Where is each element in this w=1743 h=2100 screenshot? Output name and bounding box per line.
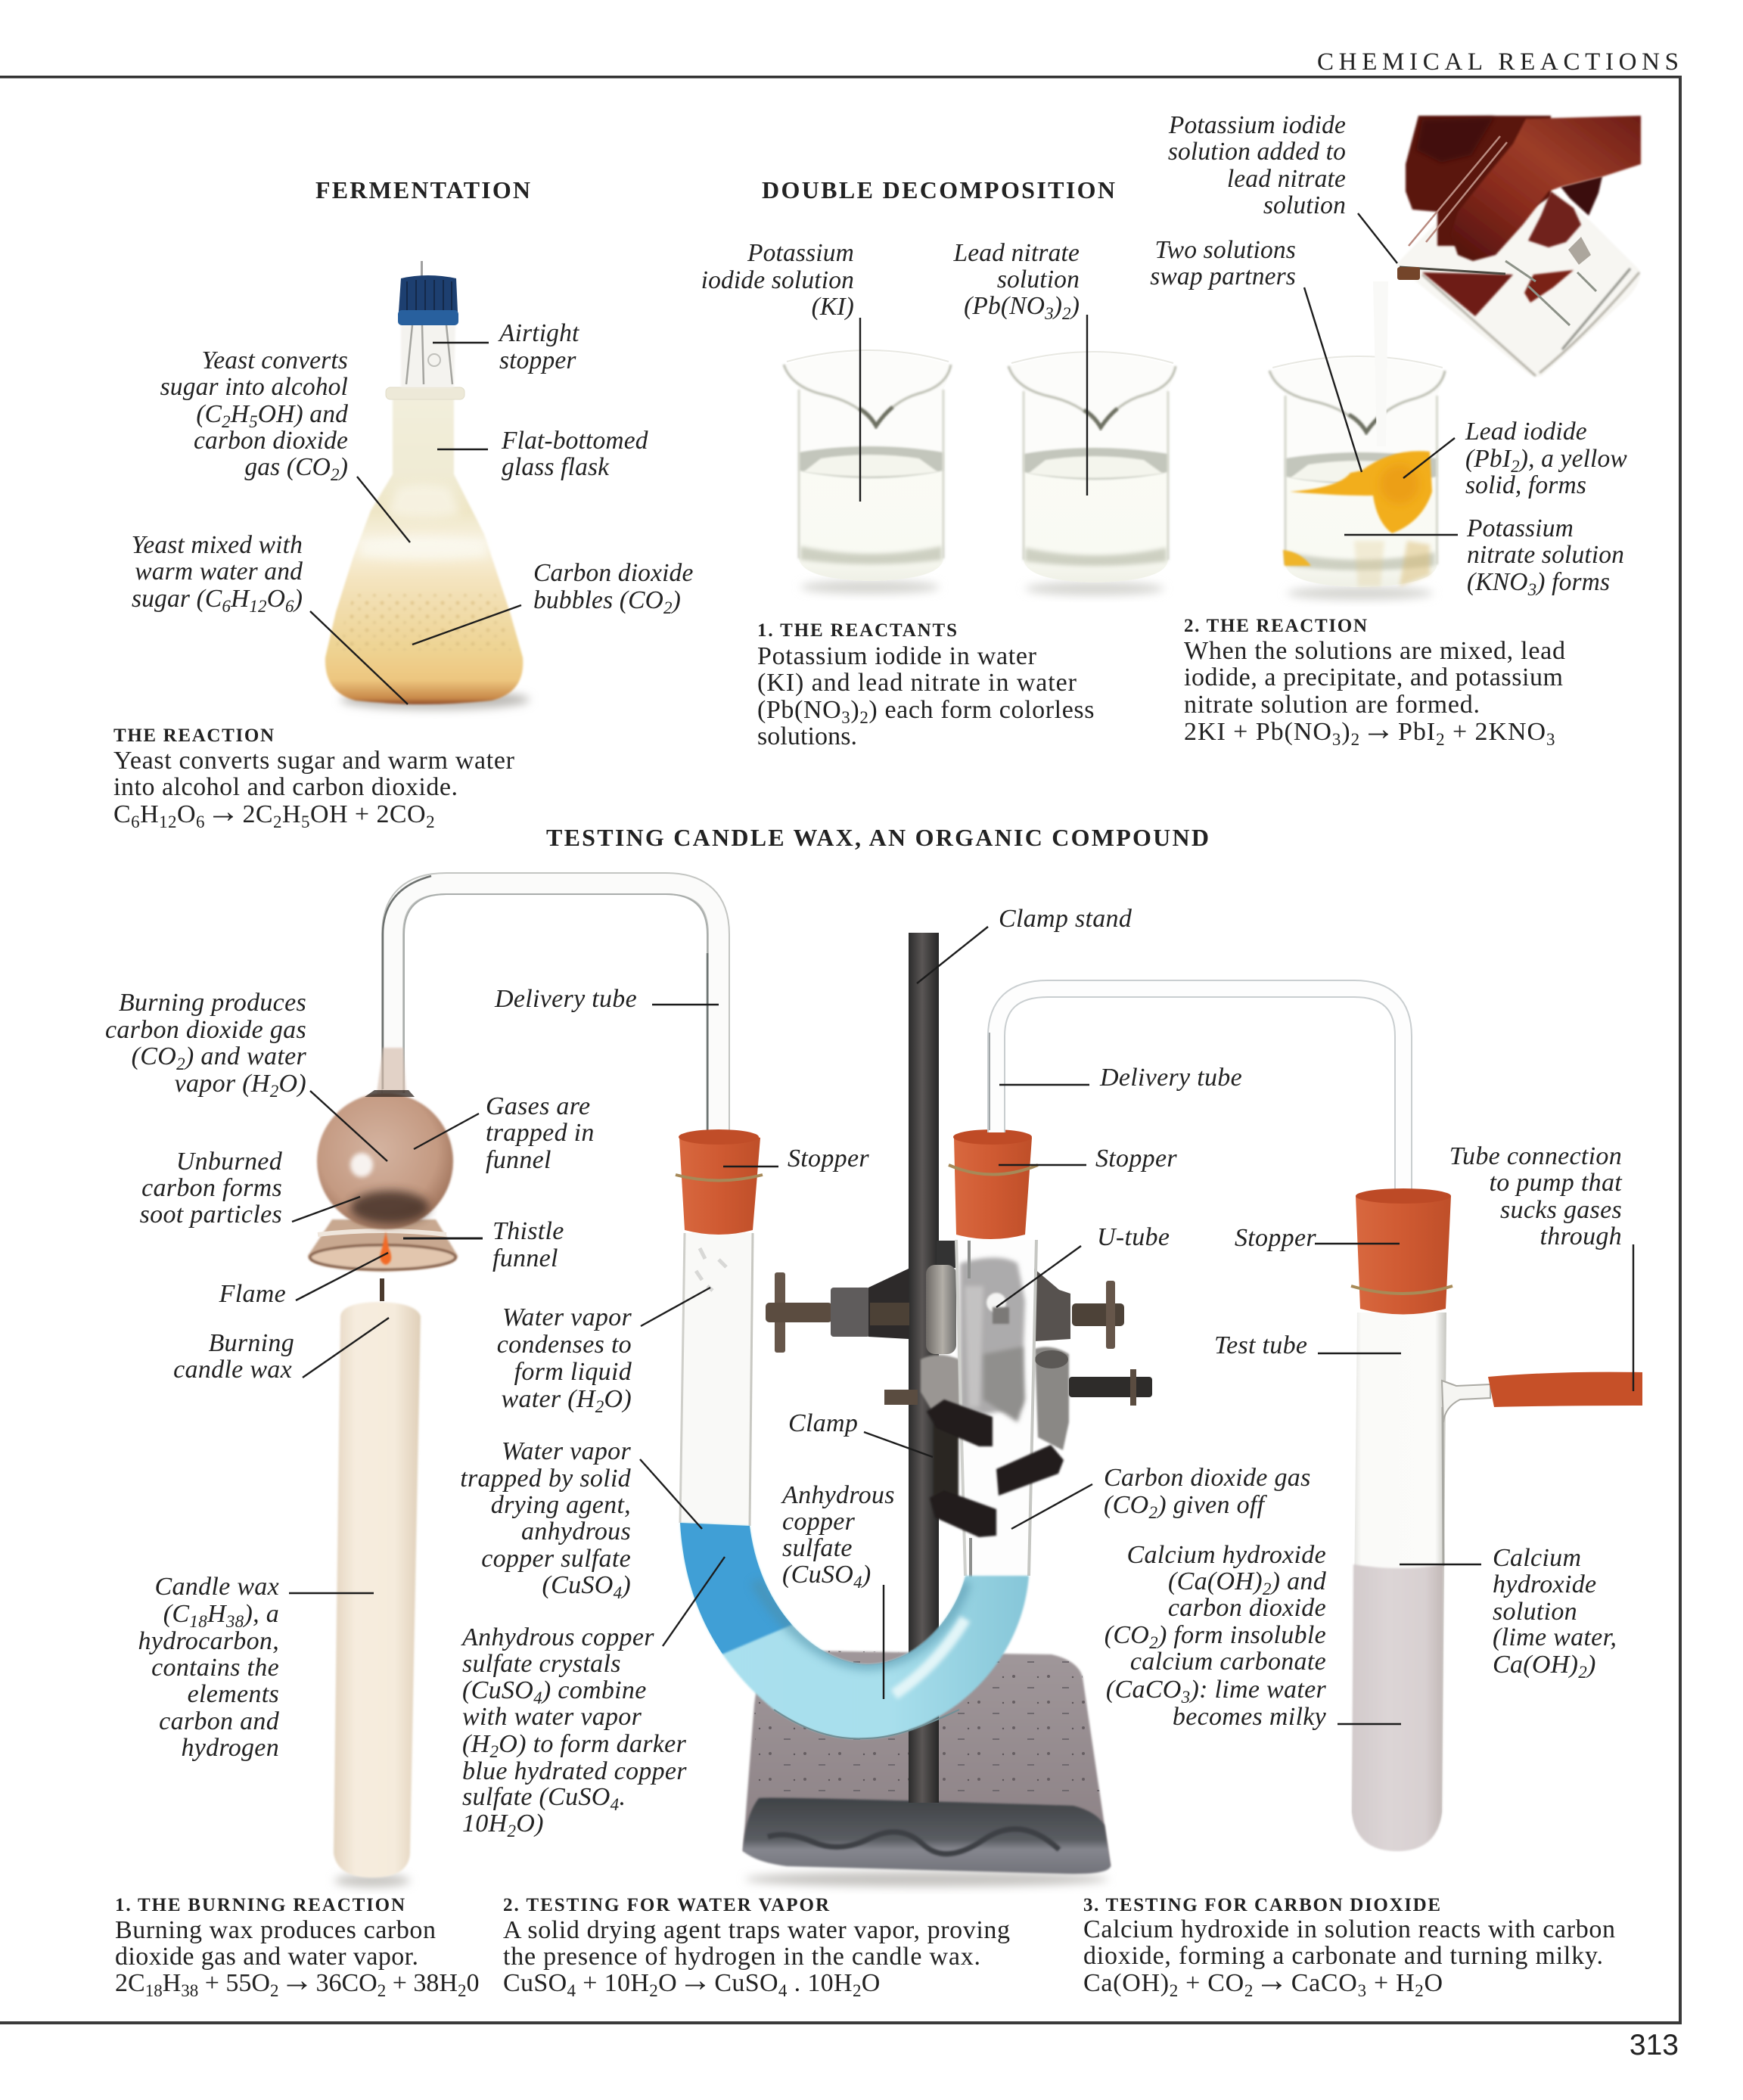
photo: candle [334,1278,421,1887]
label: calcium hydroxide solution: Ca(OH) [1493,1651,1578,1679]
label: water vapor condenses: form liquid [514,1358,632,1386]
label: yeast converts sugar: (C [196,400,222,428]
caption: the burning reaction: 2 [377,1981,386,2000]
label: water vapor trapped: trapped by solid [460,1465,632,1493]
heading: fermentation: FERMENTATION [315,176,530,203]
caption: testing for carbon dioxide: O [1424,1969,1443,1997]
label: lime water becomes milky: ) and [1270,1567,1327,1595]
label: delivery tube, left: Delivery tube [494,985,637,1013]
label: water vapor condenses: condenses to [497,1331,632,1359]
page number: 313 [1630,2029,1679,2061]
caption: the reaction, step two: 2KI + Pb(NO [1184,718,1332,746]
label: airtight stopper [433,319,579,374]
caption: the reactants [757,620,1095,750]
label: candle wax hydrocarbon: Candle wax [155,1573,279,1601]
caption: the reaction, step two: + 2KNO [1446,718,1546,746]
label: yeast mixed with water: 6 [222,597,231,616]
label: calcium hydroxide solution: solution [1493,1598,1577,1626]
label: candle wax hydrocarbon: 38 [225,1612,244,1631]
label: lime water becomes milky: ) form insoluble [1157,1621,1326,1649]
label: stopper, right arm: Stopper [1095,1145,1177,1173]
label: lime water becomes milky: (CaCO [1106,1676,1182,1704]
caption: the reactants: 2 [859,708,868,727]
label: candle wax hydrocarbon: hydrogen [181,1734,279,1762]
caption: the burning reaction: 18 [145,1981,163,2000]
page header: chemical reactions: CHEMICAL REACTIONS [1317,48,1679,76]
label: potassium nitrate: ) forms [1535,568,1610,596]
label: potassium iodide added: solution [1263,191,1346,219]
label: lead iodide: ), a yellow [1518,445,1627,473]
caption: the reaction, step two: 3 [1546,730,1555,749]
label: water vapor condenses: Water vapor [502,1303,632,1331]
label: burning produces gases: (CO [132,1042,176,1070]
label: anhydrous copper sulfate crystals: . [619,1783,626,1811]
caption: testing for water vapor: 4 [778,1981,788,2000]
label: anhydrous copper sulfate crystals: sulfate (CuSO [462,1783,611,1811]
label: yeast converts sugar: ) [338,453,348,481]
caption: the reaction: 2 [426,812,435,831]
caption: the reaction: 6 [131,812,140,831]
label: burning candle wax: Burning [208,1329,294,1357]
label: potassium nitrate [1344,514,1624,599]
label: anhydrous copper sulfate crystals: 2 [489,1742,499,1761]
label: lime water becomes milky: carbon dioxide [1168,1594,1326,1622]
caption: testing for carbon dioxide: 2 [1244,1981,1254,2000]
caption: the reaction: 5 [301,812,310,831]
caption: the reaction: into alcohol and carbon dioxide. [113,773,458,801]
label: lead nitrate solution: ) [1052,292,1062,320]
label: thistle funnel [403,1217,564,1272]
photo: U-tube with copper sulfate [666,1233,1036,1738]
label: tube connection to pump [1449,1142,1633,1391]
label: water vapor trapped: anhydrous [521,1518,631,1545]
page header: chemical reactions [0,48,1681,79]
label: lime water becomes milky: becomes milky [1173,1703,1327,1731]
label: lead nitrate solution: Lead nitrate [952,239,1080,267]
label: lead nitrate solution [952,239,1087,495]
label: burning produces gases: Burning produces [119,989,306,1017]
photo: thistle funnel with flame [308,1090,458,1272]
caption: testing for carbon dioxide: + CO [1179,1969,1244,1997]
label: lead iodide [1403,418,1627,499]
label: carbon dioxide bubbles [412,559,693,645]
label: water vapor trapped [460,1437,702,1602]
caption: the reactants: Potassium iodide in water [757,642,1037,670]
caption: the reactants: solutions. [757,722,857,750]
caption: testing for water vapor: 2 [649,1981,658,2000]
photo: fermentation flask [325,261,530,710]
label: two solutions swap partners: swap partners [1150,262,1296,290]
label: anhydrous copper sulfate crystals: ) combine [541,1676,647,1704]
label: water vapor trapped: 4 [614,1583,622,1602]
label: anhydrous copper sulfate: ) [861,1561,872,1589]
caption: the burning reaction: 2 [458,1981,466,2000]
label: lime water becomes milky: ): lime water [1188,1676,1326,1704]
label: anhydrous copper sulfate crystals: 4 [533,1688,542,1707]
caption: testing for water vapor: O [862,1969,881,1997]
label: test tube: Test tube [1214,1331,1307,1359]
label: burning produces gases: 2 [176,1055,185,1073]
caption: the reaction: THE REACTION [113,725,274,746]
caption: testing for water vapor: A solid drying agent traps water vapor, proving [503,1916,1010,1944]
label: clamp stand [917,905,1132,983]
label: stopper, test tube: Stopper [1235,1224,1316,1252]
label: gases trapped in funnel: funnel [486,1146,551,1174]
label: anhydrous copper sulfate crystals: O) [516,1810,544,1837]
label: U-tube: U-tube [1097,1223,1170,1251]
label: anhydrous copper sulfate crystals: O) to form darker [499,1730,687,1758]
caption: the reactants: (KI) and lead nitrate in water [757,669,1077,697]
caption: the reaction, step two: 2 [1351,730,1360,749]
label: potassium iodide added: solution added to [1168,138,1346,166]
label: potassium iodide solution: iodide solution [701,266,854,294]
label: anhydrous copper sulfate: 4 [853,1573,862,1592]
caption: the reaction, step two: iodide, a precipitate, and potassium [1184,663,1563,691]
label: yeast converts sugar: H [230,400,250,428]
label: calcium hydroxide solution: (lime water, [1493,1623,1617,1651]
label: thistle funnel: funnel [492,1244,558,1272]
label: lime water becomes milky [1105,1541,1401,1731]
label: potassium iodide added: lead nitrate [1227,165,1346,193]
label: anhydrous copper sulfate crystals: 2 [507,1822,516,1841]
label: carbon dioxide gas given off [1011,1464,1311,1529]
label: anhydrous copper sulfate: sulfate [782,1534,853,1562]
caption: the burning reaction: 36CO [315,1969,377,1997]
label: candle wax hydrocarbon: hydrocarbon, [138,1627,279,1655]
label: yeast mixed with water [132,531,408,704]
photo: beaker with yellow precipitate [1269,356,1445,600]
caption: the reaction, step two: 3 [1332,730,1341,749]
label: calcium hydroxide solution: Calcium [1493,1544,1581,1572]
label: lime water becomes milky: 2 [1263,1580,1272,1598]
label: lead nitrate solution: (Pb(NO [964,292,1045,320]
label: burning produces gases: ) and water [184,1042,306,1070]
label: lead nitrate solution: ) [1070,292,1080,320]
photo: stopper on left arm [676,1129,763,1235]
label: yeast converts sugar: carbon dioxide [194,427,348,455]
label: flame [219,1253,388,1308]
label: anhydrous copper sulfate: copper [782,1508,856,1536]
label: anhydrous copper sulfate crystals: 4 [611,1795,619,1814]
label: potassium nitrate: 3 [1527,580,1536,599]
label: candle wax hydrocarbon: contains the [151,1654,279,1682]
caption: the reaction, step two: ) [1341,718,1351,746]
label: carbon dioxide bubbles: bubbles (CO [533,586,663,614]
label: gases trapped in funnel [414,1092,595,1174]
label: anhydrous copper sulfate crystals: 10H [462,1810,507,1837]
label: carbon dioxide gas given off: 2 [1148,1503,1157,1522]
label: lead iodide: Lead iodide [1465,418,1587,446]
caption: the reaction: H [282,800,301,828]
label: two solutions swap partners [1150,236,1362,472]
label: unburned carbon soot: carbon forms [141,1174,282,1202]
label: water vapor condenses: 2 [595,1397,604,1416]
label: candle wax hydrocarbon [138,1573,374,1762]
caption: testing for water vapor: 2 [853,1981,862,2000]
label: yeast converts sugar: 2 [331,465,340,484]
caption: the burning reaction [115,1895,479,2000]
label: U-tube [996,1223,1170,1307]
label: yeast mixed with water: ) [293,585,303,613]
label: burning produces gases [105,989,387,1161]
caption: the reactants: (Pb(NO [757,696,841,724]
label: water vapor trapped: (CuSO [542,1571,614,1599]
label: unburned carbon soot: soot particles [140,1201,282,1229]
caption: testing for water vapor [503,1895,1010,2000]
photo: beaker with potassium iodide [784,350,951,594]
label: candle wax hydrocarbon: elements [188,1680,279,1708]
label: lead nitrate solution: 2 [1062,304,1071,323]
label: lime water becomes milky: (Ca(OH) [1168,1567,1263,1595]
caption: testing for carbon dioxide: Calcium hydroxide in solution reacts with carbon [1083,1915,1615,1943]
label: carbon dioxide bubbles: Carbon dioxide [533,559,693,587]
caption: the burning reaction: Burning wax produces carbon [115,1916,436,1944]
caption: the reaction [113,725,515,831]
label: tube connection to pump: through [1539,1222,1622,1250]
label: yeast mixed with water: O [267,585,285,613]
photo: second delivery tube [990,989,1403,1191]
label: yeast mixed with water: H [230,585,250,613]
caption: testing for carbon dioxide: 3 [1358,1981,1367,2000]
label: burning candle wax: candle wax [173,1356,292,1384]
label: water vapor condenses: water (H [501,1385,595,1413]
label: water vapor trapped: drying agent, [491,1491,631,1519]
caption: testing for water vapor: 4 [567,1981,576,2000]
label: water vapor trapped: Water vapor [502,1437,631,1465]
caption: the reaction: 2C [242,800,273,828]
caption: testing for carbon dioxide: + H [1367,1969,1415,1997]
label: thistle funnel: Thistle [492,1217,564,1245]
label: lead nitrate solution: solution [997,266,1080,294]
label: burning candle wax [173,1318,389,1384]
label: candle wax hydrocarbon: 18 [189,1612,207,1631]
caption: testing for water vapor: CuSO [503,1969,567,1997]
caption: the reaction, step two [1184,616,1565,749]
label: anhydrous copper sulfate crystals: sulfate crystals [462,1650,621,1678]
caption: the burning reaction: H [163,1969,181,1997]
label: carbon dioxide gas given off: ) given off [1156,1491,1268,1519]
label: yeast converts sugar: sugar into alcohol [160,373,348,401]
label: yeast mixed with water: warm water and [135,558,303,586]
photo: beaker with lead nitrate [1008,352,1176,595]
label: anhydrous copper sulfate crystals: Anhydrous copper [461,1623,654,1651]
label: calcium hydroxide solution [1400,1544,1617,1682]
label: lime water becomes milky: calcium carbonate [1130,1648,1326,1676]
label: calcium hydroxide solution: ) [1586,1651,1596,1679]
label: yeast converts sugar: gas (CO [244,453,331,481]
label: anhydrous copper sulfate: (CuSO [782,1561,853,1589]
label: flat-bottomed glass flask: glass flask [502,453,610,481]
label: lead nitrate solution: 3 [1044,304,1054,323]
label: burning produces gases: carbon dioxide gas [105,1016,306,1044]
caption: testing for carbon dioxide: CaCO [1291,1969,1358,1997]
label: lead iodide: (PbI [1465,445,1511,473]
label: clamp stand: Clamp stand [999,905,1132,933]
caption: the reaction, step two: 2. THE REACTION [1184,616,1367,636]
label: gases trapped in funnel: Gases are [486,1092,590,1120]
caption: testing for carbon dioxide: 2 [1415,1981,1424,2000]
caption: testing for water vapor: O [658,1969,677,1997]
caption: testing for water vapor: . 10H [788,1969,853,1997]
label: carbon dioxide bubbles: 2 [663,598,673,617]
label: potassium iodide solution [701,239,860,502]
label: water vapor trapped: ) [620,1571,631,1599]
label: yeast mixed with water: 6 [285,597,294,616]
label: two solutions swap partners: Two solutions [1154,236,1296,264]
label: yeast mixed with water: Yeast mixed with [132,531,303,559]
photo: clamp jaws in front of tube [927,1399,1064,1537]
caption: testing for water vapor: the presence of hydrogen in the candle wax. [503,1943,980,1971]
caption: the reaction: 12 [159,812,177,831]
label: unburned carbon soot: Unburned [176,1148,283,1176]
photo: clamp body behind tube [766,1241,1152,1450]
caption: the reaction: C [113,800,131,828]
photo: hand pouring beaker [1373,116,1641,446]
label: yeast converts sugar [160,346,410,542]
caption: testing for carbon dioxide: 2 [1170,1981,1179,2000]
label: delivery tube, right: Delivery tube [1099,1064,1242,1092]
label: water vapor trapped: copper sulfate [481,1545,631,1573]
caption: the reaction, step two: When the solutions are mixed, lead [1184,637,1565,665]
label: yeast converts sugar: 2 [222,412,231,431]
label: flat-bottomed glass flask: Flat-bottomed [501,427,648,455]
label: stopper, left arm: Stopper [788,1145,869,1173]
label: tube connection to pump: sucks gases [1500,1196,1622,1224]
label: flat-bottomed glass flask [437,427,648,481]
caption: the reaction: 6 [196,812,205,831]
photo: side-arm test tube with lime water [1351,1188,1642,1851]
label: candle wax hydrocarbon: (C [163,1600,189,1628]
caption: the reaction: O [177,800,196,828]
caption: testing for carbon dioxide: Ca(OH) [1083,1969,1170,1997]
label: yeast converts sugar: Yeast converts [202,346,348,374]
caption: testing for carbon dioxide [1083,1895,1615,2000]
label: lime water becomes milky: 2 [1149,1633,1158,1652]
label: candle wax hydrocarbon: carbon and [159,1707,280,1735]
caption: the burning reaction: 2C [115,1969,145,1997]
label: anhydrous copper sulfate crystals: blue hydrated copper [462,1757,687,1785]
label: airtight stopper: Airtight [498,319,579,347]
caption: the reaction: 2 [273,812,282,831]
label: yeast mixed with water: 12 [249,597,267,616]
caption: the burning reaction: 2 [270,1981,278,2000]
caption: testing for carbon dioxide: 3. TESTING FOR CARBON DIOXIDE [1083,1895,1440,1915]
photo: stand base [743,1651,1111,1887]
label: burning produces gases: 2 [270,1082,279,1101]
caption: the reaction: OH + 2CO [310,800,426,828]
caption: testing for water vapor: →CuSO [679,1962,778,1999]
caption: the reactants: ) each form colorless [868,696,1095,724]
label: anhydrous copper sulfate: Anhydrous [781,1481,895,1509]
caption: the reactants: 3 [841,708,850,727]
label: calcium hydroxide solution: 2 [1578,1663,1587,1682]
label: burning produces gases: vapor (H [175,1070,270,1098]
label: potassium iodide added: Potassium iodide [1168,111,1346,139]
caption: the reaction, step two: nitrate solution are formed. [1184,691,1480,719]
label: anhydrous copper sulfate [781,1481,895,1699]
label: potassium nitrate: nitrate solution [1467,541,1624,569]
label: candle wax hydrocarbon: H [207,1600,228,1628]
caption: the reaction, step two: PbI [1398,718,1436,746]
label: lead iodide: 2 [1511,457,1520,476]
caption: the reaction, step two: 2 [1436,730,1446,749]
caption: the burning reaction: 38 [181,1981,198,2000]
label: anhydrous copper sulfate crystals: (CuSO [462,1676,533,1704]
label: potassium iodide solution: (KI) [812,293,854,321]
label: calcium hydroxide solution: hydroxide [1493,1570,1596,1598]
label: lime water becomes milky: 3 [1181,1688,1190,1707]
heading: double decomposition: DOUBLE DECOMPOSITION [762,176,1115,203]
label: yeast mixed with water: sugar (C [132,585,222,613]
label: clamp [788,1409,933,1457]
label: burning produces gases: O) [279,1070,306,1098]
caption: testing for carbon dioxide: dioxide, forming a carbonate and turning milky. [1083,1942,1603,1970]
caption: testing for carbon dioxide: → [1255,1962,1289,1999]
caption: the burning reaction: dioxide gas and water vapor. [115,1943,418,1971]
label: tube connection to pump: to pump that [1489,1169,1623,1197]
label: anhydrous copper sulfate crystals [461,1557,725,1841]
caption: testing for water vapor: 2. TESTING FOR WATER VAPOR [503,1895,830,1915]
label: carbon dioxide gas given off: (CO [1104,1491,1148,1519]
label: anhydrous copper sulfate crystals: with water vapor [462,1703,642,1731]
caption: the burning reaction: 1. THE BURNING REACTION [115,1895,405,1915]
caption: the reactants: 1. THE REACTANTS [757,620,957,641]
caption: the burning reaction: 0 [466,1969,479,1997]
label: clamp: Clamp [788,1409,858,1437]
label: lead iodide: solid, forms [1465,471,1586,499]
caption: testing for water vapor: + 10H [576,1969,649,1997]
label: yeast converts sugar: OH) and [258,400,348,428]
label: unburned carbon soot [140,1148,360,1229]
label: lime water becomes milky: (CO [1105,1621,1149,1649]
heading: testing candle wax: TESTING CANDLE WAX, AN ORGANIC COMPOUND [546,824,1209,851]
label: carbon dioxide bubbles: ) [671,586,681,614]
label: potassium iodide added [1168,111,1397,263]
photo: clamp stand rod [909,933,939,1803]
caption: the reaction, step two: → [1362,710,1396,747]
caption: the reaction: → [207,793,240,830]
caption: the reactants: ) [850,696,859,724]
label: anhydrous copper sulfate crystals: (H [462,1730,489,1758]
label: water vapor condenses [497,1288,710,1416]
label: airtight stopper: stopper [499,346,576,374]
label: flame: Flame [219,1280,286,1308]
label: candle wax hydrocarbon: ), a [242,1600,279,1628]
label: gases trapped in funnel: trapped in [486,1119,595,1147]
caption: the reaction: Yeast converts sugar and warm water [113,747,515,775]
label: tube connection to pump: Tube connection [1449,1142,1622,1170]
label: lime water becomes milky: Calcium hydroxide [1126,1541,1326,1569]
label: potassium nitrate: Potassium [1466,514,1574,542]
caption: the burning reaction: + 55O [198,1969,270,1997]
label: water vapor condenses: O) [604,1385,632,1413]
label: yeast converts sugar: 5 [249,412,258,431]
label: potassium nitrate: (KNO [1467,568,1528,596]
caption: the reaction: H [140,800,159,828]
label: carbon dioxide gas given off: Carbon dioxide gas [1104,1464,1311,1492]
label: potassium iodide solution: Potassium [747,239,854,267]
photo: delivery tube from funnel [377,876,719,1132]
caption: the burning reaction: → [280,1962,313,1999]
caption: the burning reaction: + 38H [386,1969,458,1997]
photo: stopper on right arm [949,1129,1038,1239]
